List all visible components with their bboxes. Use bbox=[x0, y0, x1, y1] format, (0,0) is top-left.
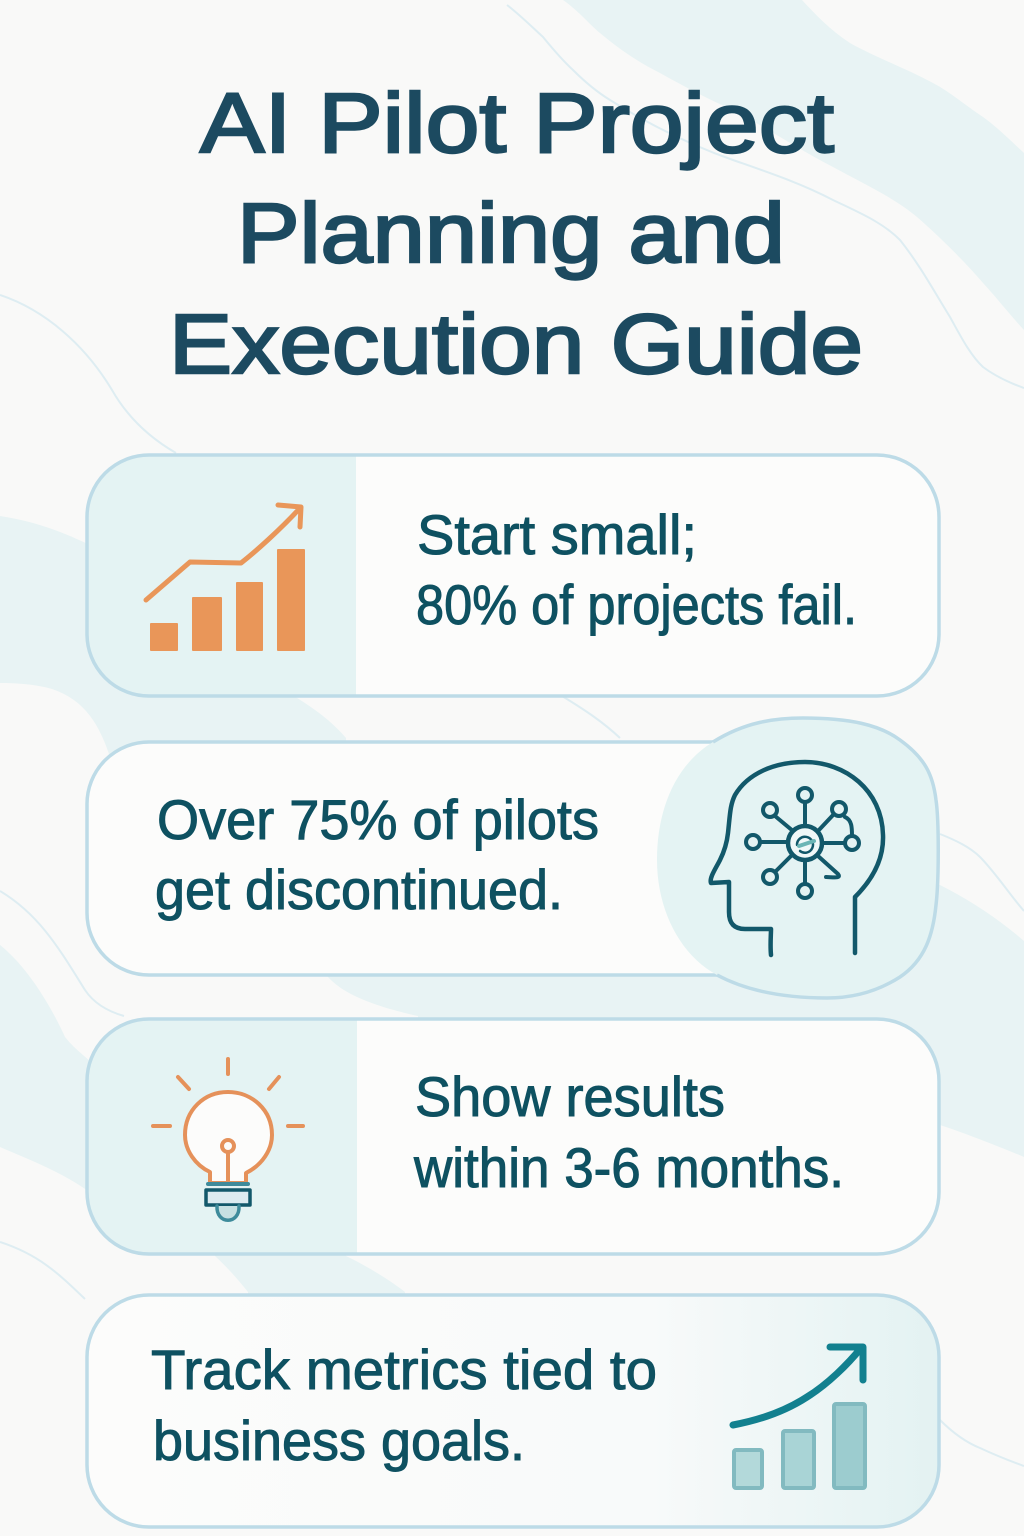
panel: show results bbox=[87, 1019, 939, 1254]
title bbox=[169, 76, 863, 391]
text: discontinued bbox=[155, 788, 599, 921]
text: discontinued: get discontinued. bbox=[155, 858, 563, 921]
text: track metrics bbox=[151, 1338, 657, 1472]
icon: light bulb bbox=[153, 1059, 303, 1220]
panel: track metrics bbox=[87, 1295, 939, 1527]
title: AI Pilot Project bbox=[200, 76, 834, 170]
text: track metrics: Track metrics tied to bbox=[151, 1338, 657, 1401]
title: Execution Guide bbox=[169, 297, 863, 391]
panel: discontinued bbox=[87, 718, 938, 998]
text: track metrics: business goals. bbox=[153, 1409, 525, 1472]
panel: start small bbox=[87, 455, 939, 696]
icon background blob bbox=[657, 718, 938, 998]
text: show results: within 3-6 months. bbox=[413, 1136, 844, 1199]
text: show results: Show results bbox=[415, 1065, 725, 1128]
text: start small: 80% of projects fail. bbox=[416, 573, 857, 636]
icon: orange bar chart with arrow bbox=[146, 505, 305, 651]
icon: head with network bbox=[711, 762, 883, 955]
text: show results bbox=[413, 1065, 844, 1199]
text: start small: Start small; bbox=[417, 503, 697, 566]
icon: teal bar chart with arrow bbox=[733, 1347, 865, 1488]
title: Planning and bbox=[237, 186, 785, 280]
text: discontinued: Over 75% of pilots bbox=[157, 788, 599, 851]
text: start small bbox=[416, 503, 857, 636]
